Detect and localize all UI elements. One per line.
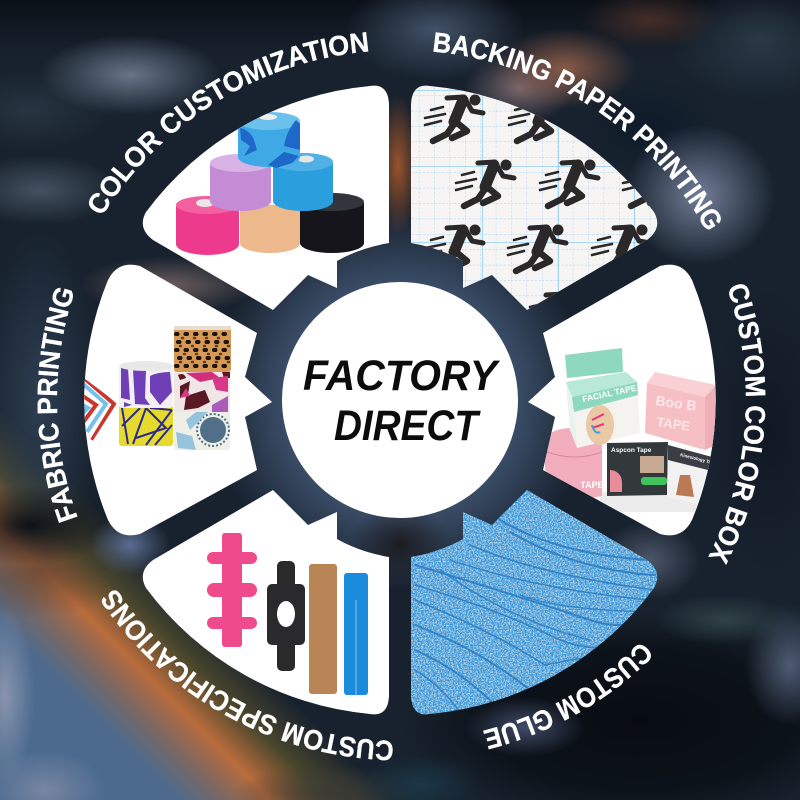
title — [303, 352, 500, 450]
panel: custom color box — [528, 264, 716, 536]
panel: backing paper printing — [411, 86, 658, 310]
icon: purple pattern tape roll — [119, 361, 173, 408]
icon: aspcon tape box — [607, 442, 668, 496]
icon: yellow triangle tape roll — [119, 405, 173, 446]
icon: pink tape roll: TAPE — [580, 480, 604, 490]
icon: boob tape box — [645, 372, 716, 450]
icon: kinesiology tape box — [667, 445, 710, 504]
icon: pink tape roll — [545, 428, 604, 500]
heading: custom color box: CUSTOM COLOR BOX — [708, 284, 766, 565]
icon: runners — [424, 94, 650, 308]
icon: camouflage pink tape roll — [174, 368, 230, 412]
glue streaks — [415, 520, 655, 712]
panel: color customization — [142, 86, 389, 310]
panel: fabric printing — [84, 264, 272, 536]
panel: custom specifications — [143, 490, 389, 714]
heading: color customization: COLOR CUSTOMIZATION — [88, 32, 368, 213]
icon: facial tape box: FACIAL TAPE — [581, 383, 637, 404]
center circle — [282, 282, 518, 518]
title: DIRECT — [334, 402, 481, 450]
icon: boob tape box: TAPE — [656, 414, 691, 434]
icon: pink tape roll — [176, 196, 239, 255]
icon: black strip with hole — [267, 561, 305, 671]
heading: custom glue: CUSTOM GLUE — [483, 644, 651, 750]
icon: chevron tape roll — [84, 378, 116, 440]
icon: grey blue pattern tape roll — [174, 407, 230, 450]
icon: black tape roll — [300, 193, 364, 253]
icon: tan tape roll — [240, 205, 300, 253]
heading: custom specifications: CUSTOM SPECIFICATIONS — [102, 590, 393, 760]
heading: fabric printing: FABRIC PRINTING — [38, 288, 78, 523]
icon: camouflage tape roll — [238, 112, 300, 168]
icon: blue split strip — [344, 573, 368, 695]
icon: kinesiology tape box: Kinesiology Tape — [680, 452, 717, 466]
icon: tan strip — [309, 564, 337, 694]
heading: backing paper printing: BACKING PAPER PRINTING — [433, 32, 721, 230]
title: FACTORY — [303, 352, 500, 400]
icon: purple tape roll — [210, 154, 271, 211]
panel: custom glue — [411, 490, 658, 714]
icon: boob tape box: Boo B — [655, 392, 698, 414]
icon: facial tape box — [565, 348, 640, 448]
icon: blue tape roll — [273, 153, 333, 211]
icon: pink strip with tabs — [207, 533, 257, 647]
icon: aspcon tape box: Aspcon Tape — [611, 447, 652, 454]
icon: leopard tape roll — [174, 326, 231, 372]
